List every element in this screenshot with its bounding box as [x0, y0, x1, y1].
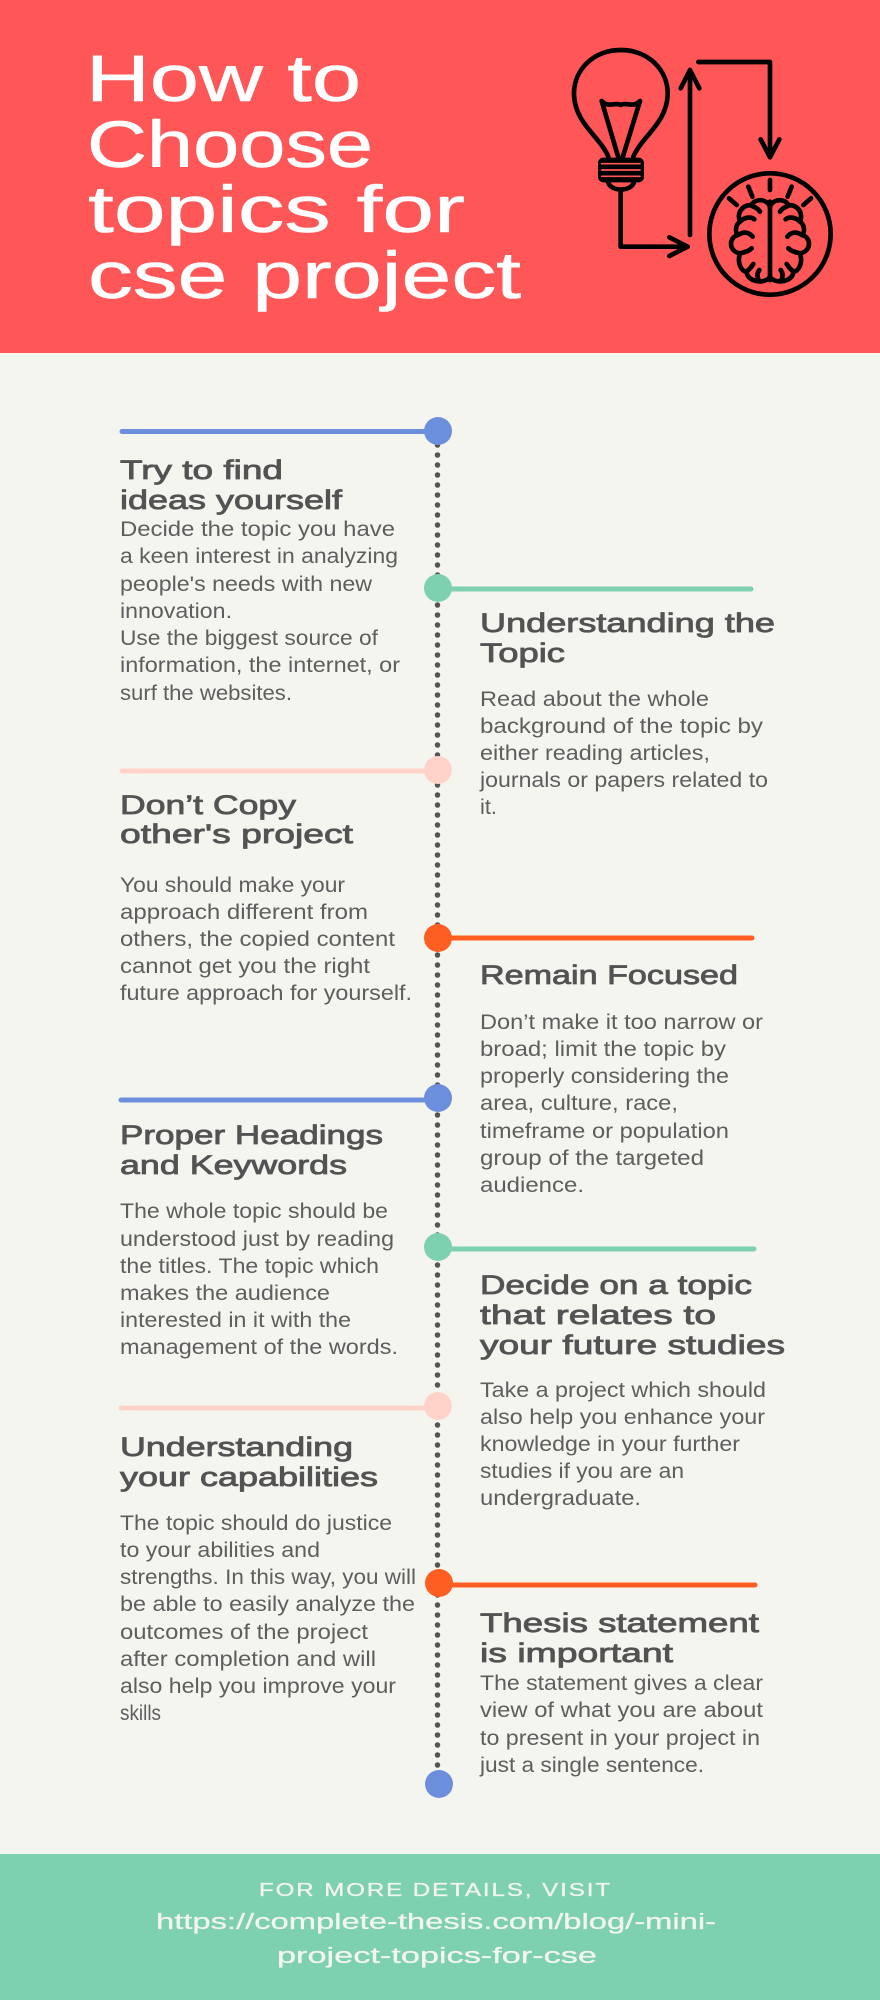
heading: Understanding [120, 1432, 353, 1462]
body text: The whole topic should be [120, 1200, 388, 1223]
footer link: https://complete-thesis.com/blog/-mini- [156, 1909, 716, 1934]
body text: undergraduate. [480, 1487, 641, 1510]
body text: after completion and will [120, 1648, 376, 1671]
section: Thesis statement is important [425, 1569, 763, 1777]
heading: Don’t Copy [120, 790, 297, 820]
arrow: up [681, 70, 699, 235]
body text [480, 1379, 766, 1510]
footer link: project-topics-for-cse [277, 1943, 597, 1968]
body text [479, 688, 768, 819]
timeline end dot [425, 1770, 453, 1798]
heading [480, 1608, 760, 1668]
heading [480, 1270, 785, 1360]
body text: surf the websites. [120, 682, 292, 705]
arrow: bulb to upward arrow [621, 190, 688, 256]
body text: Decide the topic you have [120, 518, 395, 541]
body text: it. [480, 796, 497, 819]
body text [120, 1512, 416, 1725]
body text: broad; limit the topic by [480, 1038, 727, 1061]
body text: information, the internet, or [120, 654, 400, 677]
arrow: right and down to brain [698, 62, 779, 157]
heading: Decide on a topic [480, 1270, 752, 1300]
section: Understanding your capabilities [120, 1392, 452, 1725]
icon: light bulb [574, 50, 668, 189]
body text: Don’t make it too narrow or [480, 1011, 763, 1034]
header panel [0, 0, 880, 353]
body text: be able to easily analyze the [120, 1593, 415, 1616]
heading [120, 790, 354, 849]
section: Understanding the Topic [424, 574, 775, 819]
icon: light bulb, arrows and brain [574, 50, 831, 295]
body text: skills [120, 1702, 161, 1725]
body text: outcomes of the project [120, 1621, 368, 1644]
section: Proper Headings and Keywords [120, 1084, 452, 1359]
body text: management of the words. [120, 1336, 398, 1359]
body text: Read about the whole [480, 688, 709, 711]
heading [120, 1120, 383, 1180]
body text: You should make your [120, 874, 345, 897]
heading: Understanding the [480, 608, 775, 638]
heading [480, 608, 775, 668]
heading: your future studies [480, 1330, 785, 1360]
body text: people's needs with new [120, 573, 373, 596]
heading: Thesis statement [480, 1608, 760, 1638]
heading: is important [480, 1638, 674, 1668]
body text: studies if you are an [480, 1460, 684, 1483]
body text [120, 518, 400, 705]
body text: Use the biggest source of [120, 627, 378, 650]
body text: future approach for yourself. [120, 982, 412, 1005]
timeline: dotted vertical line [435, 445, 440, 1775]
body text: interested in it with the [120, 1309, 351, 1332]
heading [120, 1432, 378, 1492]
footer call to action: FOR MORE DETAILS, VISIT [259, 1879, 612, 1900]
body text: knowledge in your further [480, 1433, 740, 1456]
body text: either reading articles, [480, 742, 710, 765]
body text: approach different from [120, 901, 368, 924]
heading: your capabilities [120, 1462, 378, 1492]
body text: view of what you are about [480, 1699, 763, 1722]
heading: that relates to [480, 1300, 716, 1330]
body text: makes the audience [120, 1282, 330, 1305]
body text: audience. [480, 1174, 584, 1197]
body text: understood just by reading [120, 1228, 394, 1251]
heading: Proper Headings [120, 1120, 383, 1150]
heading [120, 455, 343, 515]
body text: The topic should do justice [120, 1512, 392, 1535]
body text: others, the copied content [120, 928, 395, 951]
title [86, 41, 521, 312]
body text: group of the targeted [480, 1147, 704, 1170]
title: How to [86, 41, 361, 115]
icon: brain in circle [709, 173, 831, 295]
heading: other's project [120, 819, 354, 849]
footer link [156, 1909, 716, 1968]
heading: Try to find [120, 455, 283, 485]
title: cse project [88, 238, 521, 312]
section: Remain Focused [424, 924, 763, 1197]
body text: properly considering the [480, 1065, 729, 1088]
body text: timeframe or population [480, 1120, 729, 1143]
body text: background of the topic by [480, 715, 764, 738]
body text: strengths. In this way, you will [120, 1566, 416, 1589]
body text: area, culture, race, [480, 1092, 678, 1115]
body text: also help you improve your [120, 1675, 396, 1698]
section: Try to find ideas yourself [120, 417, 452, 705]
body text: just a single sentence. [479, 1754, 704, 1777]
body text: innovation. [120, 600, 232, 623]
heading: Topic [480, 638, 565, 668]
body text [120, 874, 412, 1005]
body text [479, 1672, 763, 1777]
body text: Take a project which should [480, 1379, 766, 1402]
body text [480, 1011, 763, 1197]
body text [120, 1200, 398, 1359]
footer panel [0, 1854, 880, 2000]
body text: also help you enhance your [480, 1406, 765, 1429]
body text: to present in your project in [480, 1727, 760, 1750]
body text: journals or papers related to [479, 769, 768, 792]
body text: The statement gives a clear [480, 1672, 763, 1695]
heading: Remain Focused [480, 960, 738, 990]
body text: to your abilities and [120, 1539, 320, 1562]
heading: and Keywords [120, 1150, 347, 1180]
section: Don't Copy other's project [120, 756, 452, 1005]
body text: cannot get you the right [120, 955, 370, 978]
title: Choose [87, 107, 373, 181]
body text: a keen interest in analyzing [120, 545, 398, 568]
heading: ideas yourself [120, 485, 343, 515]
title: topics for [88, 172, 465, 246]
body text: the titles. The topic which [120, 1255, 379, 1278]
section: Decide on a topic that relates to your future studies [424, 1233, 785, 1510]
